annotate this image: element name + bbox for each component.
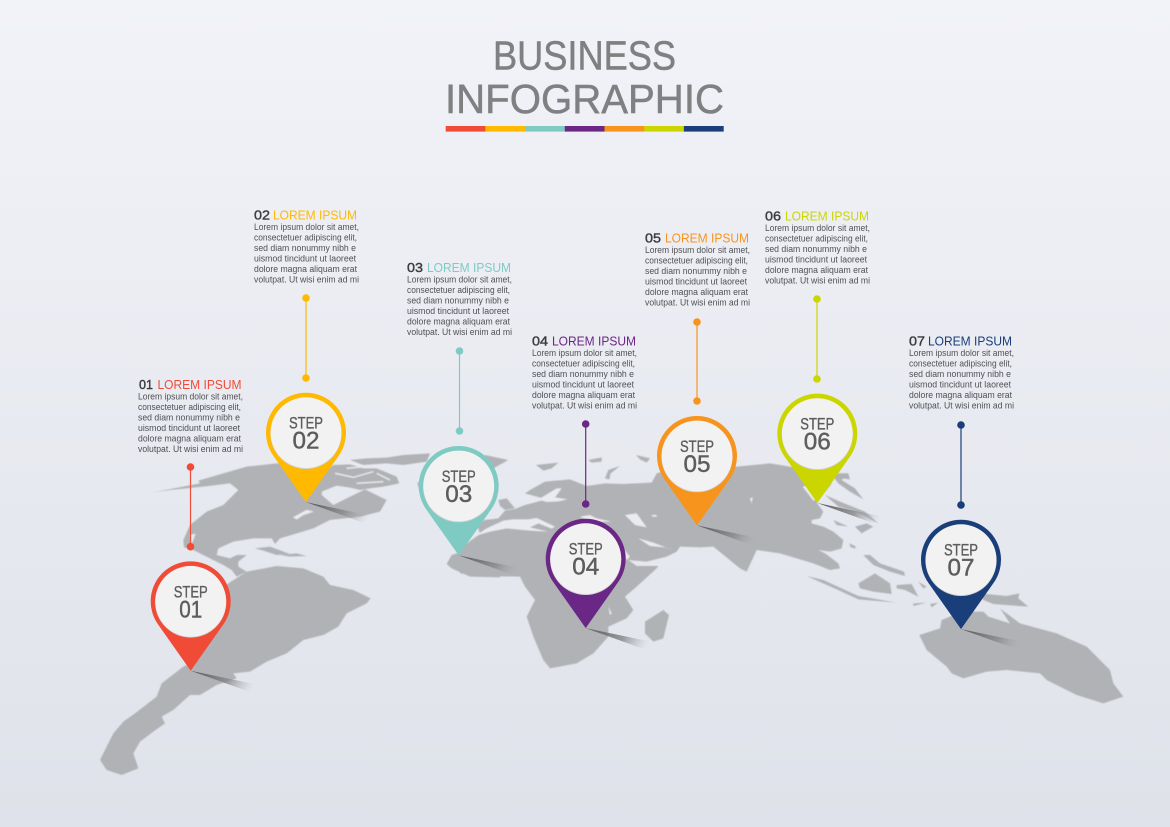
- step 01 text block: Lorem ipsum dolor sit amet,: [138, 392, 243, 402]
- title: BUSINESS: [493, 32, 676, 78]
- map: Great Lakes and Arctic channels: [190, 467, 390, 544]
- pin: step 06: 06: [804, 429, 831, 456]
- pin: step 07: 07: [948, 555, 974, 582]
- step 01 text block: 01: [139, 377, 153, 392]
- step 04 text block: consectetuer adipiscing elit,: [532, 358, 635, 370]
- step 02 text block: 02: [254, 208, 270, 222]
- map: Europe, Asia and Africa: [460, 455, 878, 668]
- pin: step 01: [151, 561, 261, 692]
- step 07 text block: [909, 334, 1014, 412]
- world map: [100, 453, 1123, 775]
- pin: step 07: STEP: [944, 542, 978, 560]
- step 04 text block: dolore magna aliquam erat: [532, 390, 635, 401]
- step 04 text block: [532, 334, 637, 412]
- step 01 text block: uismod tincidunt ut laoreet: [138, 423, 240, 434]
- step 05 text block: [645, 230, 750, 308]
- step 04 text block: sed diam nonummy nibh e: [532, 369, 634, 380]
- title colour bar: [446, 126, 724, 132]
- step 06 text block: Lorem ipsum dolor sit amet,: [765, 223, 870, 234]
- step 04 text block: uismod tincidunt ut laoreet: [532, 380, 634, 390]
- step 03 text block: dolore magna aliquam erat: [407, 317, 510, 328]
- pin: step 03: 03: [445, 481, 472, 508]
- pin: step 06: [777, 394, 887, 525]
- pin: step 04: STEP: [569, 541, 603, 559]
- step 05 text block: sed diam nonummy nibh e: [645, 266, 747, 277]
- step 02 text block: consectetuer adipiscing elit,: [254, 232, 357, 244]
- step 05 text block: Lorem ipsum dolor sit amet,: [645, 245, 750, 256]
- connector 07: [957, 421, 965, 509]
- pin: step 05: 05: [684, 451, 710, 478]
- pin: step 02: STEP: [289, 415, 323, 433]
- step 04 text block: Lorem ipsum dolor sit amet,: [532, 348, 637, 359]
- step 01 text block: volutpat. Ut wisi enim ad mi: [138, 444, 243, 455]
- title: INFOGRAPHIC: [445, 76, 724, 122]
- step 03 text block: volutpat. Ut wisi enim ad mi: [407, 327, 512, 338]
- step 02 text block: [254, 208, 359, 286]
- step 06 text block: uismod tincidunt ut laoreet: [765, 254, 867, 266]
- step 04 text block: volutpat. Ut wisi enim ad mi: [532, 400, 637, 412]
- pin: step 02: [266, 393, 376, 524]
- step 06 text block: volutpat. Ut wisi enim ad mi: [765, 276, 870, 286]
- step 05 text block: uismod tincidunt ut laoreet: [645, 276, 747, 288]
- step 03 text block: 03: [407, 260, 423, 275]
- step 07 text block: volutpat. Ut wisi enim ad mi: [909, 400, 1014, 412]
- connector 03: [456, 347, 463, 435]
- step 04 text block: 04: [532, 334, 548, 348]
- step 01 text block: dolore magna aliquam erat: [138, 434, 241, 445]
- connector 04: [582, 420, 590, 508]
- step 03 text block: consectetuer adipiscing elit,: [407, 285, 510, 296]
- map: Madagascar: [645, 610, 669, 642]
- step 02 text block: LOREM IPSUM: [273, 208, 357, 222]
- map: UK and Iceland: [498, 498, 515, 510]
- step 03 text block: uismod tincidunt ut laoreet: [407, 306, 509, 317]
- pin: step 07: [921, 520, 1031, 651]
- step 01 text block: consectetuer adipiscing elit,: [138, 402, 241, 413]
- step 06 text block: dolore magna aliquam erat: [765, 265, 868, 276]
- connector 02: [302, 294, 310, 382]
- step 05 text block: volutpat. Ut wisi enim ad mi: [645, 298, 750, 308]
- step 07 text block: dolore magna aliquam erat: [909, 390, 1012, 401]
- map: Arctic Canada and Greenland: [320, 453, 508, 492]
- pin: step 02: 02: [292, 428, 320, 455]
- pin: step 01: 01: [179, 596, 202, 623]
- connector 05: [693, 318, 701, 405]
- pin: step 03: [419, 446, 529, 577]
- step 07 text block: sed diam nonummy nibh e: [909, 369, 1011, 380]
- map: Southeast Asia and Australia: [807, 543, 1123, 703]
- step 07 text block: Lorem ipsum dolor sit amet,: [909, 348, 1014, 359]
- title: [445, 32, 724, 122]
- step 01 text block: [138, 377, 243, 455]
- step 01 text block: LOREM IPSUM: [158, 377, 242, 392]
- step 03 text block: LOREM IPSUM: [427, 260, 511, 275]
- step 07 text block: uismod tincidunt ut laoreet: [909, 380, 1011, 390]
- step 06 text block: consectetuer adipiscing elit,: [765, 234, 868, 244]
- pin: step 06: STEP: [800, 416, 834, 434]
- map: Kamchatka and Japan: [833, 473, 863, 499]
- step 02 text block: Lorem ipsum dolor sit amet,: [254, 222, 359, 233]
- connector 06: [813, 295, 821, 383]
- pin: step 05: [657, 416, 767, 547]
- step 07 text block: LOREM IPSUM: [928, 334, 1012, 348]
- step 02 text block: sed diam nonummy nibh e: [254, 243, 356, 254]
- step 04 text block: LOREM IPSUM: [552, 334, 636, 348]
- step 01 text block: sed diam nonummy nibh e: [138, 413, 240, 424]
- map: seas: [475, 485, 817, 615]
- step 02 text block: uismod tincidunt ut laoreet: [254, 254, 356, 264]
- connector 01: [187, 463, 194, 550]
- step 03 text block: Lorem ipsum dolor sit amet,: [407, 274, 512, 286]
- step 06 text block: LOREM IPSUM: [785, 208, 869, 224]
- step 05 text block: LOREM IPSUM: [665, 230, 749, 246]
- step 05 text block: consectetuer adipiscing elit,: [645, 256, 748, 266]
- pin: step 04: 04: [572, 554, 599, 581]
- map: the Americas: [100, 463, 500, 775]
- step 05 text block: 05: [645, 230, 661, 246]
- step 05 text block: dolore magna aliquam erat: [645, 287, 748, 298]
- step 07 text block: consectetuer adipiscing elit,: [909, 358, 1012, 370]
- step 06 text block: sed diam nonummy nibh e: [765, 244, 867, 255]
- pin: step 05: STEP: [680, 438, 714, 456]
- pin: step 03: STEP: [442, 468, 476, 486]
- pin: step 01: STEP: [174, 583, 208, 601]
- step 03 text block: sed diam nonummy nibh e: [407, 296, 509, 307]
- step 02 text block: volutpat. Ut wisi enim ad mi: [254, 274, 359, 286]
- step 03 text block: [407, 260, 512, 338]
- step 02 text block: dolore magna aliquam erat: [254, 264, 357, 275]
- step 06 text block: [765, 208, 870, 286]
- step 07 text block: 07: [909, 334, 925, 348]
- step 06 text block: 06: [765, 208, 781, 224]
- pin: step 04: [546, 519, 656, 650]
